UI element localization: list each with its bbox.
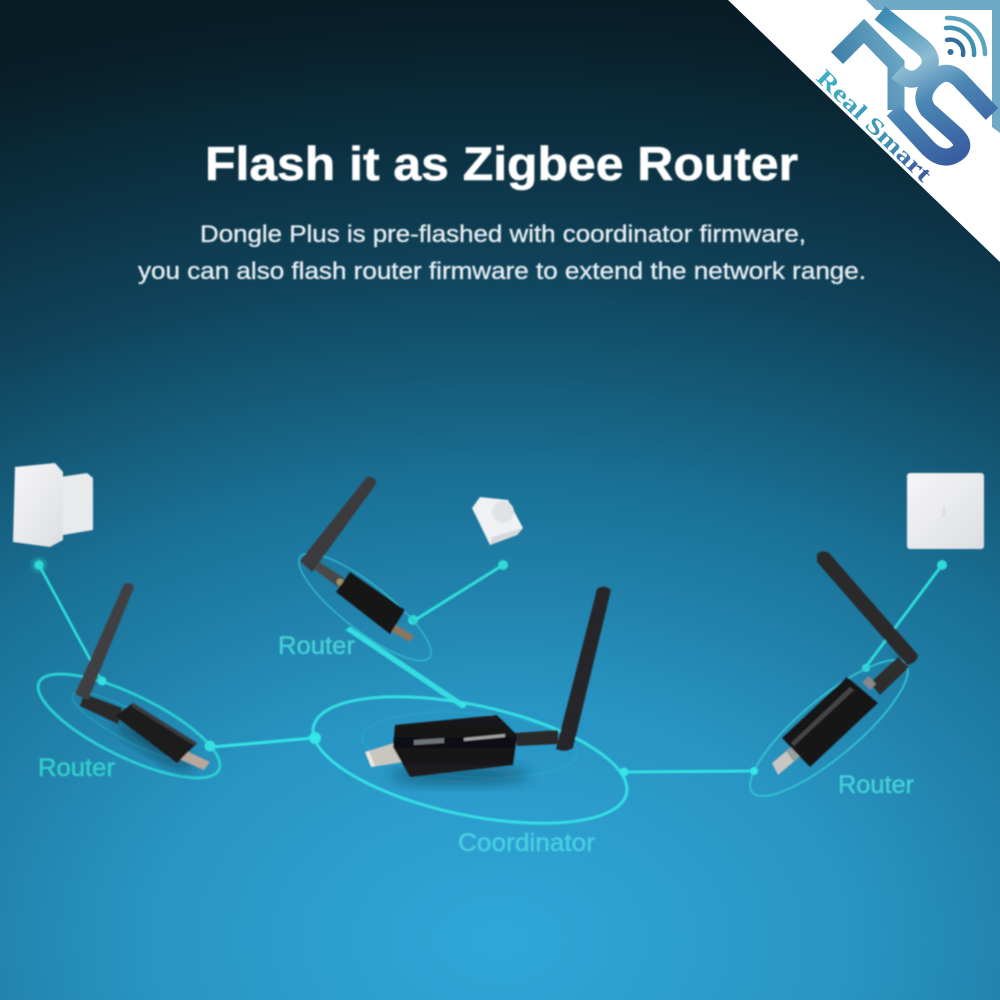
description text <box>138 221 866 285</box>
ring: right router <box>734 642 924 814</box>
connection: knob sensor to upper router <box>408 560 508 625</box>
logo: RS monogram <box>837 13 992 157</box>
device: coordinator dongle <box>365 587 611 785</box>
logo: wifi symbol <box>946 18 985 55</box>
connection: coordinator to upper router <box>346 627 466 708</box>
ring: upper router <box>286 538 444 676</box>
description text: you can also flash router firmware to extend the network range. <box>138 258 866 285</box>
connection: coordinator to right router <box>625 771 753 772</box>
connection: left sensor to left router <box>32 558 100 678</box>
connection: left router to coordinator <box>212 738 313 747</box>
corner ribbon: logo backing band <box>866 0 1000 133</box>
label: router upper: Router <box>278 632 355 660</box>
label: coordinator: Coordinator <box>458 829 595 857</box>
ring: left router <box>26 654 232 798</box>
device: door sensor <box>13 463 93 547</box>
device: upper router dongle <box>300 477 414 642</box>
label: router right: Router <box>838 771 914 799</box>
title: Flash it as Zigbee Router <box>205 137 798 190</box>
description text: Dongle Plus is pre-flashed with coordinator firmware, <box>200 221 806 248</box>
device: right router dongle <box>772 551 918 775</box>
connection: right sensor to right router <box>862 560 947 672</box>
network diagram <box>13 463 984 857</box>
device: knob sensor <box>472 497 523 545</box>
ring: coordinator <box>302 673 638 847</box>
device: wireless switch <box>907 473 984 549</box>
corner ribbon: white triangle <box>728 0 1000 262</box>
device: left router dongle <box>75 583 210 777</box>
label: router left: Router <box>38 754 115 782</box>
logo: Real Smart text: Real Smart <box>812 65 937 187</box>
